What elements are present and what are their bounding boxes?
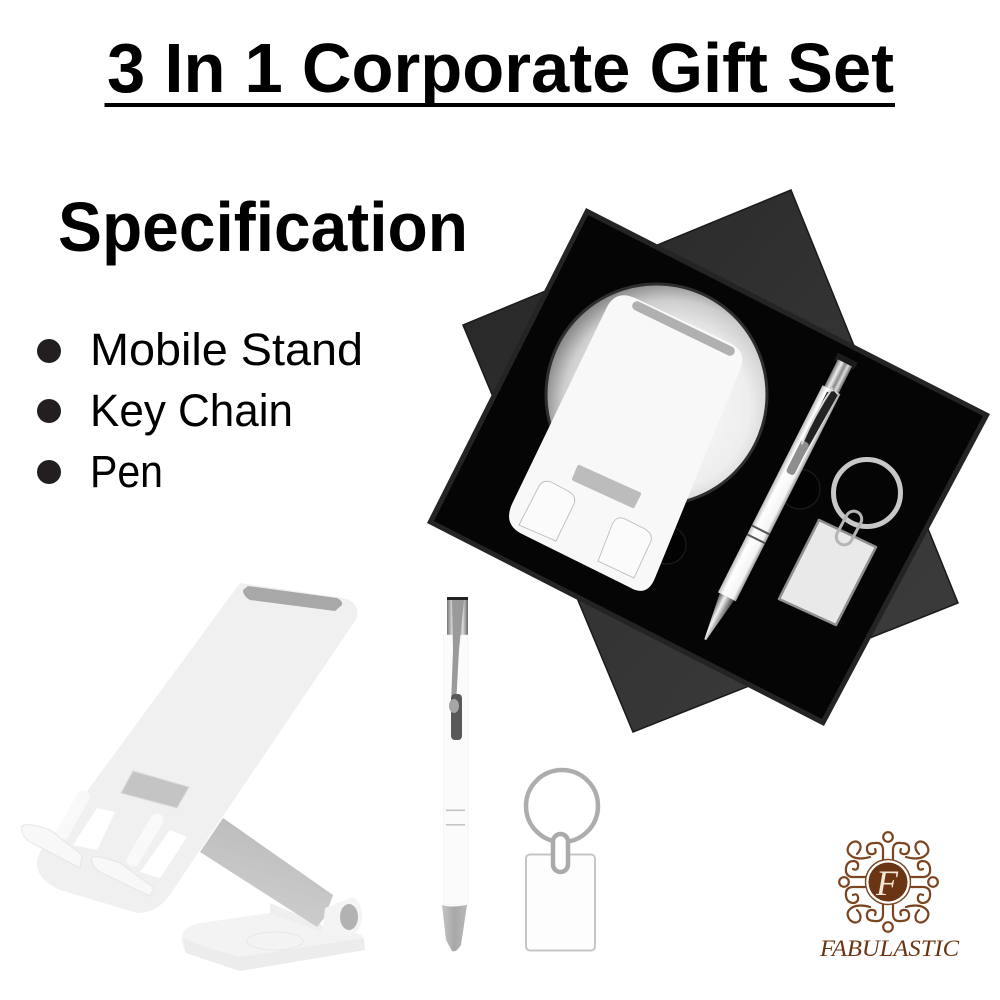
stand posts: [63, 797, 157, 860]
boxed key tag: [779, 520, 876, 625]
stand top slot: [637, 306, 730, 351]
standalone pen: [442, 597, 468, 951]
boxed key link: [833, 508, 865, 548]
pen tip: [442, 905, 467, 951]
pen top edge: [447, 597, 468, 600]
stand centre plate: [121, 771, 189, 808]
boxed key chain: [779, 460, 900, 625]
box lid behind: [463, 190, 958, 732]
specification list: [37, 324, 363, 497]
logo: Fabulastic: [819, 832, 960, 961]
stand hinge: [323, 897, 362, 936]
stand top grip: [243, 586, 342, 611]
stand centre plate: [574, 467, 639, 506]
stand cutouts: [73, 808, 115, 850]
box tray: [427, 208, 990, 726]
pen clip: [451, 600, 464, 705]
list item: key chain: Key Chain: [90, 385, 293, 436]
pen body: [444, 635, 468, 905]
stand base: [182, 903, 365, 971]
logo emblem: [839, 832, 938, 932]
finger notches: [648, 469, 820, 564]
stand arm: [200, 818, 333, 927]
pen rings: [446, 810, 465, 826]
stand back plate: [22, 583, 357, 913]
key ring: [526, 770, 598, 842]
pen cap: [447, 597, 468, 639]
boxed pen: [695, 353, 858, 645]
list item: mobile stand: Mobile Stand: [90, 324, 363, 375]
list item: pen: [37, 446, 163, 497]
folded mobile stand: [509, 295, 742, 591]
boxed pen dark sides near clip: [788, 388, 839, 474]
mobile stand product: [22, 583, 365, 971]
list item: pen: Pen: [90, 446, 163, 497]
logo letter: F: [875, 863, 899, 903]
round recess: [546, 284, 767, 505]
heading: specification: Specification: [58, 188, 468, 266]
key link: [553, 834, 568, 872]
stand foot right: [598, 518, 651, 578]
title: 3 In 1 Corporate Gift Set: [107, 29, 894, 107]
standalone key chain: [526, 770, 598, 950]
stand foot left: [519, 481, 575, 541]
logo wordmark: FABULASTIC: [819, 936, 960, 961]
gift box photo: [427, 190, 990, 732]
pen clip tail: [451, 694, 462, 740]
boxed key ring: [834, 460, 900, 526]
key tag: [526, 854, 595, 950]
stand foot flaps: [22, 825, 82, 868]
pen clip ball: [449, 699, 459, 713]
